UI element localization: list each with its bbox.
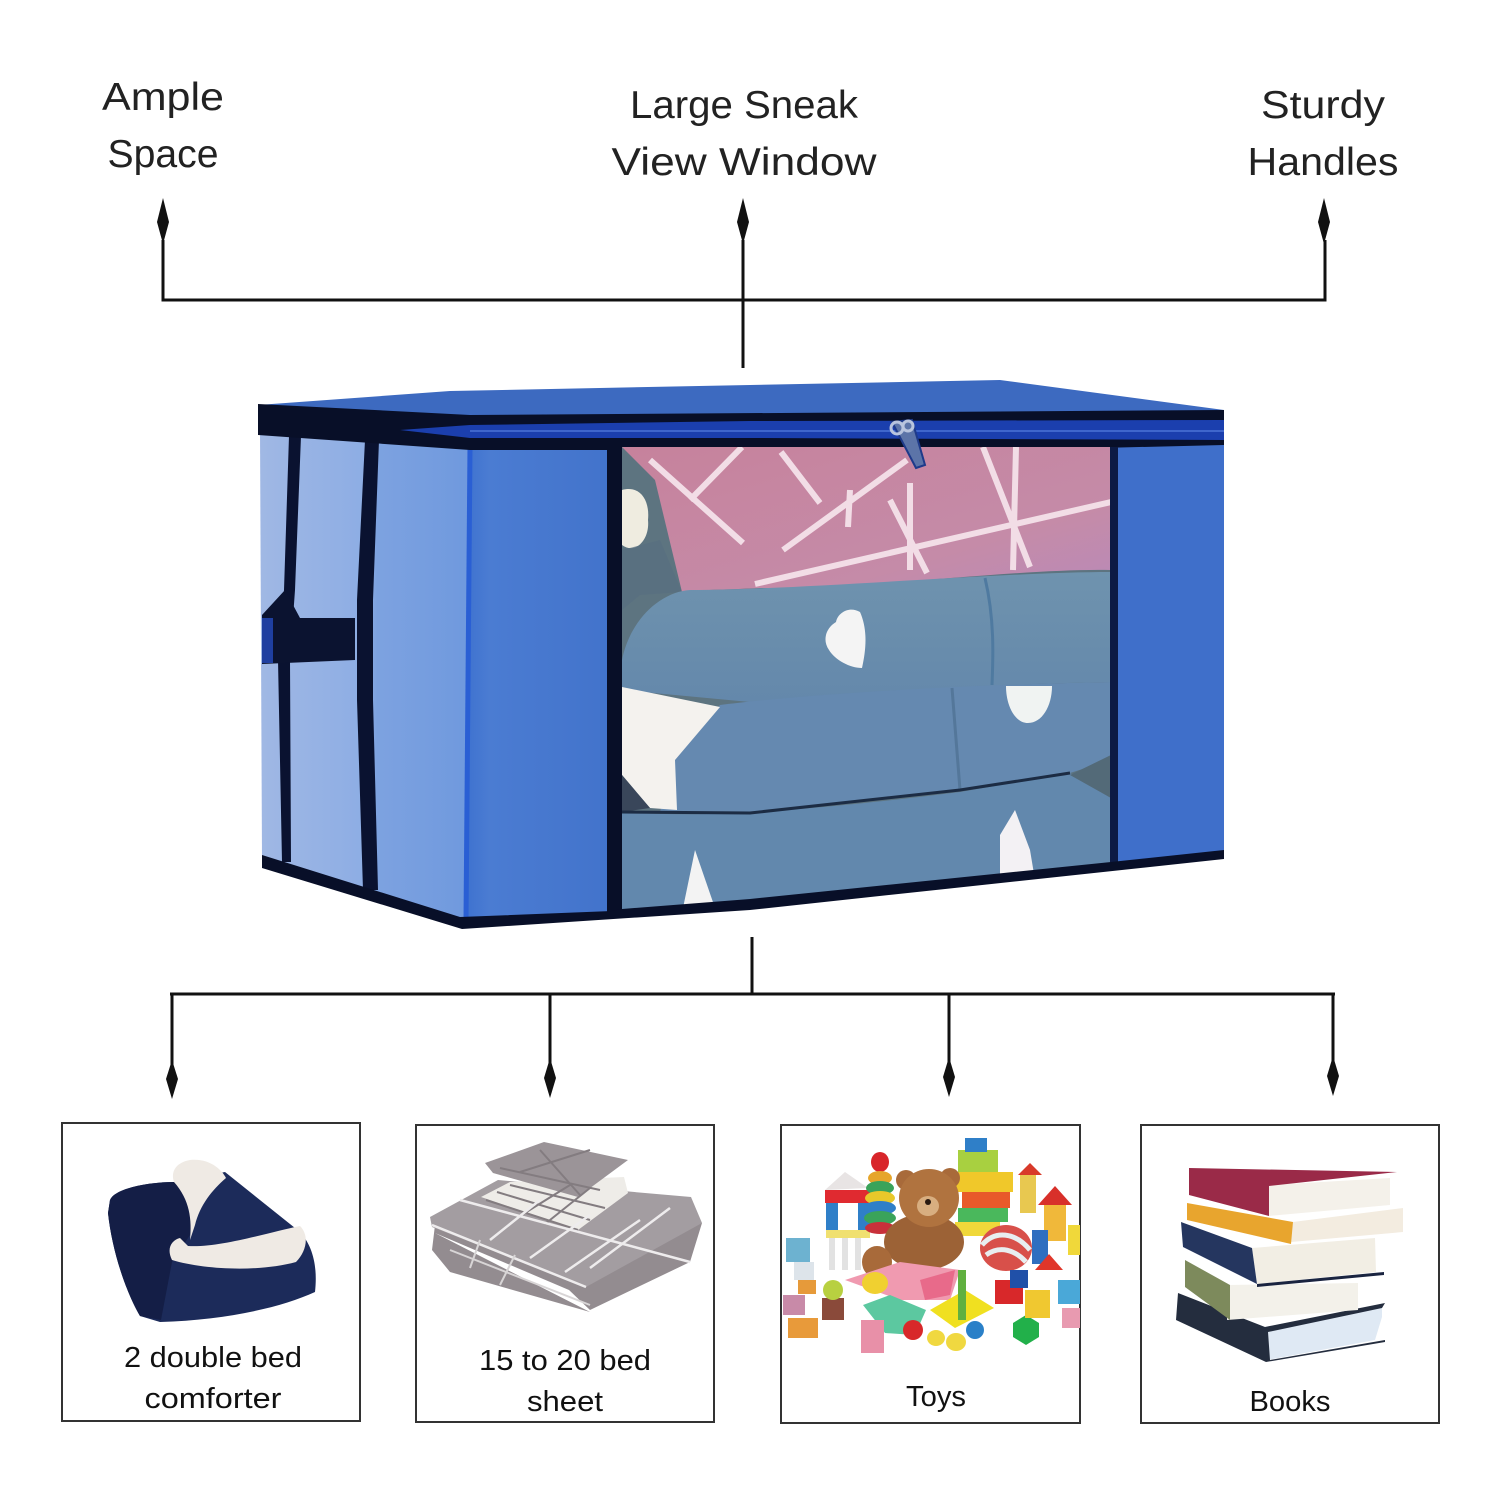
icon: folded sheets <box>430 1142 702 1312</box>
label: Sturdy Handles <box>1248 84 1398 184</box>
caption: sheet <box>527 1386 603 1418</box>
middle blue blanket <box>660 682 1111 813</box>
corner seam <box>466 447 470 920</box>
label: Large Sneak View Window: Large Sneak <box>630 84 859 127</box>
caption: Books <box>1250 1386 1330 1418</box>
book 2 <box>1291 1208 1403 1242</box>
window frame left <box>607 445 622 915</box>
small towers <box>1018 1163 1042 1175</box>
zipper band <box>258 404 1224 450</box>
label: Large Sneak View Window: View Window <box>612 141 877 184</box>
panel: toys <box>781 1125 1080 1423</box>
book 1 <box>1269 1178 1390 1216</box>
label: Sturdy Handles: Sturdy <box>1261 84 1386 127</box>
label: Large Sneak View Window <box>612 84 877 184</box>
zipper pull <box>891 420 925 468</box>
caption: comforter <box>144 1383 282 1415</box>
icon: folded comforter <box>108 1160 316 1322</box>
bag right side panel <box>1114 445 1224 866</box>
caption: 2 double bed <box>124 1342 302 1374</box>
handle <box>262 590 355 664</box>
icon: toy pile <box>783 1138 1080 1353</box>
caption <box>479 1345 651 1418</box>
bag front panel <box>468 445 612 922</box>
label: Ample Space <box>102 76 224 176</box>
top connector arrows <box>157 198 1330 368</box>
side straps <box>278 436 379 890</box>
bottom connector arrows <box>166 937 1339 1099</box>
white blanket underside <box>622 687 720 810</box>
moon <box>1006 686 1052 723</box>
lower blue blanket <box>622 773 1111 912</box>
pink blanket <box>622 447 1111 592</box>
bag lid <box>258 380 1224 425</box>
spinning top <box>980 1225 1032 1271</box>
label: Ample Space: Space <box>108 133 218 176</box>
caption <box>124 1342 302 1415</box>
bag bottom edge <box>262 850 1224 929</box>
book 3 <box>1252 1238 1376 1284</box>
panel: bed sheets <box>416 1125 714 1422</box>
icon: book stack <box>1176 1168 1403 1362</box>
yellow wedge <box>930 1290 994 1328</box>
panel: books <box>1141 1125 1439 1423</box>
foam mat <box>845 1262 960 1300</box>
book 5 <box>1265 1305 1382 1360</box>
label: Ample Space: Ample <box>102 76 224 119</box>
storage bag <box>258 380 1224 929</box>
cloud <box>825 610 866 668</box>
bag left side panel <box>260 430 470 922</box>
block tower <box>955 1138 1013 1236</box>
balls and ducks <box>903 1320 923 1340</box>
toy train <box>995 1280 1023 1304</box>
book 4 <box>1227 1283 1358 1320</box>
pink letter block <box>861 1320 884 1353</box>
stacking rings <box>864 1152 896 1234</box>
window with blankets <box>262 445 1224 929</box>
panel: comforter <box>62 1123 360 1421</box>
teddy bear <box>862 1168 964 1278</box>
left blocks <box>786 1238 810 1262</box>
upper blue blanket <box>622 572 1111 702</box>
caption: 15 to 20 bed <box>479 1345 651 1377</box>
window frame right <box>1110 447 1118 868</box>
label: Sturdy Handles: Handles <box>1248 141 1398 184</box>
toy house <box>825 1172 868 1190</box>
caption: Toys <box>906 1381 966 1413</box>
cloud at left behind pink blanket <box>622 489 648 548</box>
